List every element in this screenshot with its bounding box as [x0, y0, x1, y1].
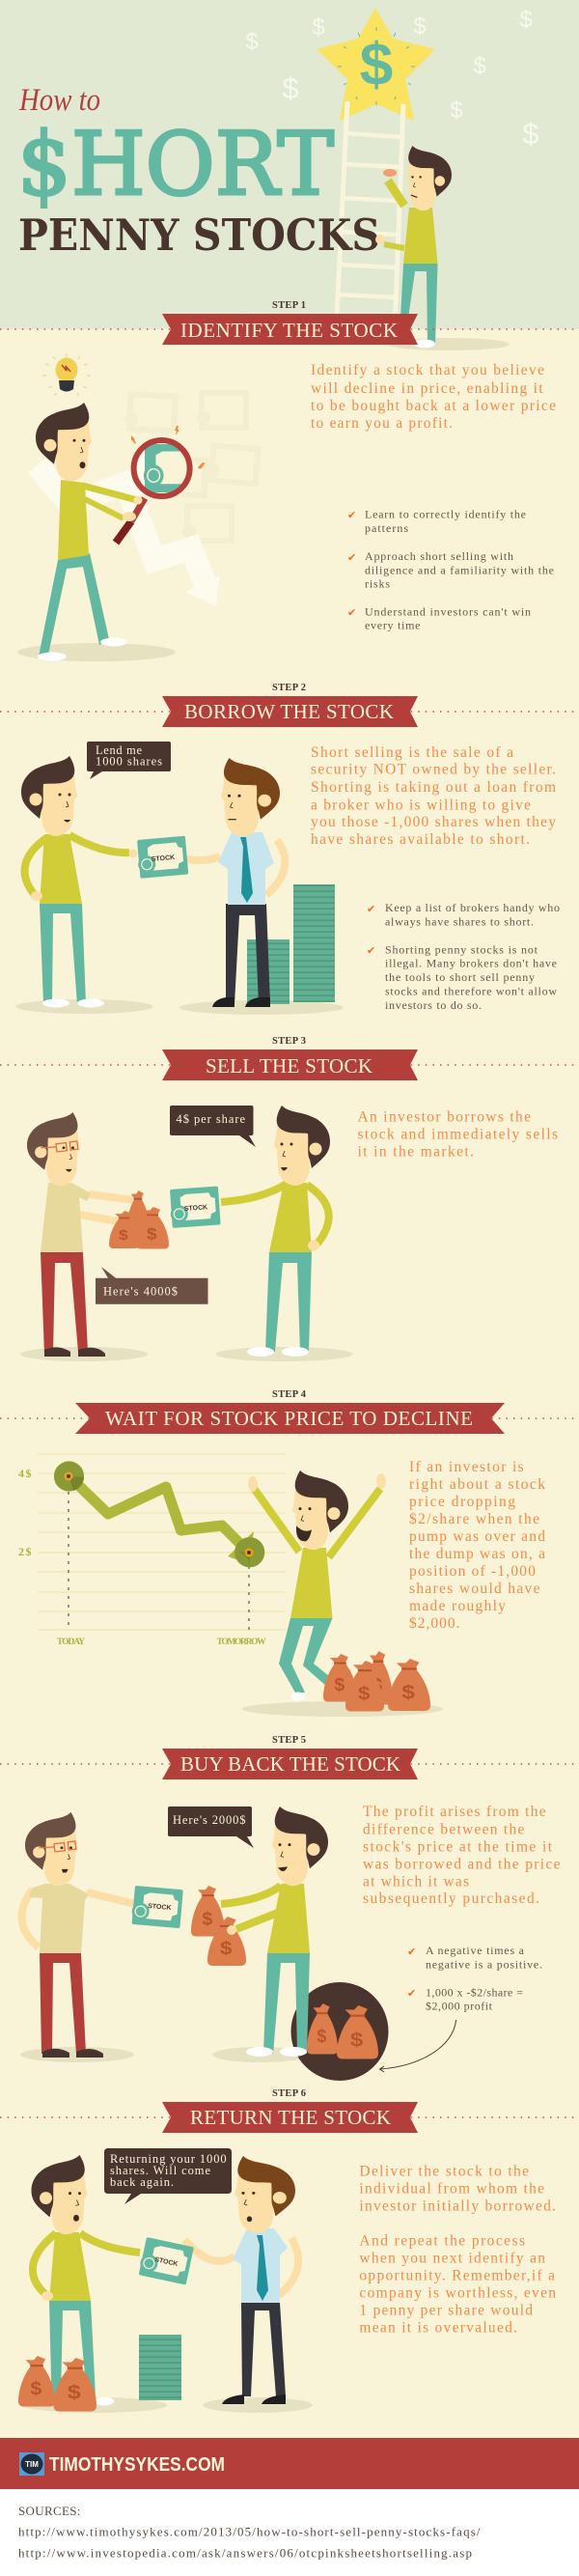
speech bubble: price: 4$ per share	[176, 1112, 245, 1126]
icon: star with dollar	[317, 8, 435, 121]
description	[363, 1804, 561, 1907]
shadow left	[20, 1347, 148, 1361]
description	[359, 2163, 556, 2336]
shadow left	[22, 2397, 167, 2413]
checklist: risks	[365, 576, 390, 590]
icon: money bags: $	[358, 1683, 371, 1704]
description: $2/share when the	[409, 1511, 539, 1527]
checklist	[367, 901, 560, 1012]
icon: money bags in hand: $	[220, 1939, 233, 1959]
description: And repeat the process	[359, 2232, 525, 2249]
icon: money bags in hand	[191, 1886, 246, 1966]
character: climber	[375, 146, 452, 348]
sparks	[131, 426, 206, 469]
banner	[162, 696, 418, 727]
character: borrower returning	[31, 2155, 140, 2406]
checklist: ✔	[407, 1987, 416, 2000]
magnifying glass	[116, 440, 201, 543]
sources: http://www.timothysykes.com/2013/05/how-to-short-sell-penny-stocks-faqs/	[18, 2525, 481, 2539]
checklist: always have shares to short.	[385, 914, 534, 928]
icon: money bags: $	[401, 1681, 415, 1703]
falling arrow	[37, 465, 220, 606]
description: will decline in price, enabling it	[311, 380, 543, 397]
icon: stock certificate: STOCK	[184, 1204, 207, 1213]
shadow right	[212, 2047, 309, 2062]
panel: header	[0, 0, 579, 350]
description: security NOT owned by the seller.	[311, 762, 556, 778]
step label: STEP 3	[272, 1036, 306, 1047]
curved arrow	[380, 2020, 456, 2072]
checklist: ✔	[407, 1946, 416, 1958]
step label: STEP 2	[272, 683, 306, 693]
speech bubble: Lend me	[96, 743, 142, 757]
title: PENNY STOCKS	[18, 210, 380, 261]
description: made roughly	[409, 1598, 506, 1614]
chart: price decline: TOMORROW	[217, 1638, 266, 1647]
description: to earn you a profit.	[311, 415, 453, 432]
floating dollar signs: $	[519, 7, 533, 33]
chart: price decline: 4$	[18, 1467, 31, 1480]
description: to be bought back at a lower price	[311, 398, 556, 414]
checklist: stocks and therefore won't allow	[385, 985, 557, 998]
checklist: 1,000 x -$2/share =	[426, 1985, 523, 1999]
description: the dump was on, a	[409, 1546, 545, 1562]
footer bar	[0, 2438, 579, 2489]
floating dollar signs: $	[522, 117, 539, 151]
description: price dropping	[409, 1494, 515, 1510]
description: An investor borrows the	[357, 1109, 531, 1126]
character: seller	[221, 1106, 330, 1357]
character: investor with magnifier	[36, 403, 206, 660]
speech bubble: back again.	[110, 2175, 174, 2189]
speech bubble: payment	[96, 1267, 208, 1304]
description: individual from whom the	[359, 2180, 544, 2197]
checklist: A negative times a	[426, 1944, 525, 1957]
banner: BORROW THE STOCK	[184, 700, 394, 723]
checklist: ✔	[347, 551, 356, 564]
icon: stock certificate	[136, 836, 188, 879]
checklist: Shorting penny stocks is not	[385, 942, 538, 956]
shadow right	[203, 2397, 313, 2413]
icon: stock certificate: STOCK	[148, 1903, 172, 1912]
shadow left	[15, 999, 152, 1014]
description: it in the market.	[357, 1144, 474, 1161]
icon: money bags: $	[147, 1225, 157, 1243]
description: when you next identify an	[359, 2250, 545, 2266]
description	[357, 1109, 558, 1161]
description: have shares available to short.	[311, 831, 530, 848]
banner: BUY BACK THE STOCK	[180, 1752, 400, 1776]
icon: money bags	[18, 2356, 96, 2412]
description: a broker who is willing to give	[311, 797, 531, 813]
speech bubble: payment: Here's 4000$	[103, 1285, 178, 1299]
checklist: ✔	[347, 606, 356, 619]
description: you those -1,000 shares when they	[311, 814, 556, 830]
banner: WAIT FOR STOCK PRICE TO DECLINE	[105, 1407, 473, 1430]
icon: stock certificate	[131, 1886, 183, 1928]
description: stock and immediately sells	[357, 1127, 558, 1143]
shadow left	[20, 2047, 134, 2062]
checklist: Learn to correctly identify the	[365, 508, 526, 521]
icon: money bags: $	[68, 2381, 81, 2403]
shadow under climber	[388, 338, 510, 350]
checklist: $2,000 profit	[426, 2000, 493, 2013]
speech bubble	[104, 2148, 232, 2204]
icon: money bags: $	[334, 1675, 345, 1695]
icon: money bags	[109, 1190, 169, 1249]
panel: step 6	[18, 2088, 556, 2413]
panel: step 2	[15, 683, 560, 1015]
description: company is worthless, even	[359, 2284, 556, 2301]
description: pump was over and	[409, 1528, 545, 1545]
description: If an investor is	[409, 1459, 524, 1475]
icon: money bags: $	[30, 2378, 42, 2399]
speech bubble: Here's 2000$	[173, 1813, 245, 1827]
chart: price decline: TODAY	[57, 1638, 85, 1647]
character: broker	[184, 2156, 298, 2404]
checklist: Understand investors can't win	[365, 604, 531, 618]
ladder	[337, 101, 403, 319]
character: buyer with glasses	[27, 1112, 135, 1357]
logo: TIM	[25, 2460, 39, 2469]
description	[409, 1459, 545, 1632]
checklist: diligence and a familiarity with the	[365, 563, 554, 576]
checklist: the tools to short sell penny	[385, 970, 535, 984]
title: $HORT	[17, 114, 334, 215]
checklist: Keep a list of brokers handy who	[385, 901, 560, 914]
banner	[75, 1403, 505, 1434]
description: at which it was	[363, 1873, 469, 1890]
banner	[162, 2102, 418, 2133]
description: right about a stock	[409, 1476, 545, 1493]
description: was borrowed and the price	[363, 1856, 561, 1872]
icon: stock certificate: STOCK	[154, 2256, 179, 2268]
icon: star with dollar: $	[360, 32, 393, 98]
shadow	[17, 643, 176, 661]
speech bubble: price	[170, 1106, 256, 1147]
checklist	[407, 1944, 542, 2013]
description: difference between the	[363, 1821, 525, 1837]
banner	[162, 1050, 418, 1080]
icon: money bags: $	[119, 1227, 128, 1244]
description	[311, 744, 556, 848]
checklist: ✔	[347, 509, 356, 521]
dark circle with money bags: $	[317, 2026, 327, 2046]
cash stacks	[247, 884, 335, 1004]
speech bubble: Returning your 1000	[110, 2152, 227, 2166]
panel: step 1	[17, 300, 556, 661]
description: mean it is overvalued.	[359, 2319, 517, 2336]
step label: STEP 5	[272, 1735, 306, 1746]
description: stock's price at the time it	[363, 1838, 553, 1855]
banner: IDENTIFY THE STOCK	[180, 319, 398, 342]
floating dollar signs: $	[245, 29, 259, 55]
floating dollar signs: $	[312, 14, 325, 41]
checklist: patterns	[365, 521, 408, 535]
shadow	[242, 1701, 443, 1717]
character: seller with money	[221, 1806, 328, 2057]
icon: money bags	[323, 1651, 430, 1711]
icon: stock certificate	[169, 1187, 221, 1228]
site name: TIMOTHYSYKES.COM	[49, 2454, 225, 2476]
dark circle with money bags: $	[350, 2029, 364, 2051]
faded certificates	[124, 393, 258, 541]
icon: money bags in hand: $	[202, 1908, 212, 1929]
description: investor initially borrowed.	[359, 2198, 556, 2214]
logo	[19, 2452, 44, 2476]
panel: step 4	[18, 1389, 545, 1717]
description: shares would have	[409, 1581, 540, 1597]
shadow right	[179, 1000, 344, 1015]
banner	[162, 314, 418, 345]
speech bubble: 1000 shares	[96, 755, 162, 769]
cash stack	[139, 2335, 181, 2400]
sources: http://www.investopedia.com/ask/answers/06/otcpinksheetshortselling.asp	[18, 2545, 472, 2560]
speech bubble	[168, 1806, 254, 1848]
description: Deliver the stock to the	[359, 2163, 529, 2179]
step label: STEP 6	[272, 2088, 306, 2099]
character: broker	[183, 758, 285, 1007]
checklist: ✔	[367, 944, 375, 957]
panel: step 5	[20, 1735, 561, 2081]
floating dollar signs	[245, 7, 539, 151]
icon: light bulb	[42, 353, 91, 396]
description: Identify a stock that you believe	[311, 362, 544, 378]
description: $2,000.	[409, 1615, 459, 1632]
icon: stock certificate: STOCK	[152, 854, 175, 863]
dark circle with money bags	[291, 1982, 388, 2081]
speech bubble	[87, 742, 171, 779]
checklist: ✔	[367, 903, 375, 915]
checklist: negative is a positive.	[426, 1957, 542, 1971]
banner	[162, 1749, 418, 1779]
character: borrower	[21, 756, 137, 1008]
decorative dotted lines	[0, 329, 579, 2117]
checklist: investors to do so.	[385, 998, 482, 1012]
banner: RETURN THE STOCK	[190, 2106, 391, 2129]
icon: money bags: $	[373, 1674, 383, 1696]
floating dollar signs: $	[473, 53, 486, 79]
sources: SOURCES:	[18, 2504, 80, 2518]
chart: price decline	[18, 1454, 286, 1647]
sources	[18, 2504, 481, 2560]
icon: stock certificate	[138, 2237, 194, 2285]
description: position of -1,000	[409, 1563, 536, 1580]
character: buyer with glasses	[22, 1812, 135, 2058]
title	[17, 83, 380, 261]
checklist: illegal. Many brokers don't have	[385, 957, 557, 970]
checklist: every time	[365, 619, 421, 632]
checklist	[347, 508, 554, 632]
description: Shorting is taking out a loan from	[311, 779, 556, 796]
description	[311, 362, 556, 432]
description: 1 penny per share would	[359, 2302, 533, 2318]
description: The profit arises from the	[363, 1804, 546, 1820]
title: How to	[18, 83, 100, 118]
description: opportunity. Remember,if a	[359, 2267, 555, 2283]
banner: SELL THE STOCK	[206, 1054, 372, 1078]
step label: STEP 4	[272, 1389, 307, 1400]
description: subsequently purchased.	[363, 1890, 539, 1907]
chart: price decline: 2$	[18, 1545, 31, 1558]
floating dollar signs: $	[450, 98, 463, 124]
speech bubble: shares. Will come	[110, 2164, 210, 2177]
step label: STEP 1	[272, 300, 306, 311]
shadow right	[216, 1347, 353, 1361]
description: Short selling is the sale of a	[311, 744, 513, 761]
floating dollar signs: $	[282, 71, 299, 105]
checklist: Approach short selling with	[365, 549, 513, 563]
floating dollar signs: $	[413, 14, 427, 40]
character: celebrating investor	[248, 1470, 386, 1701]
panel: step 3	[20, 1036, 558, 1361]
